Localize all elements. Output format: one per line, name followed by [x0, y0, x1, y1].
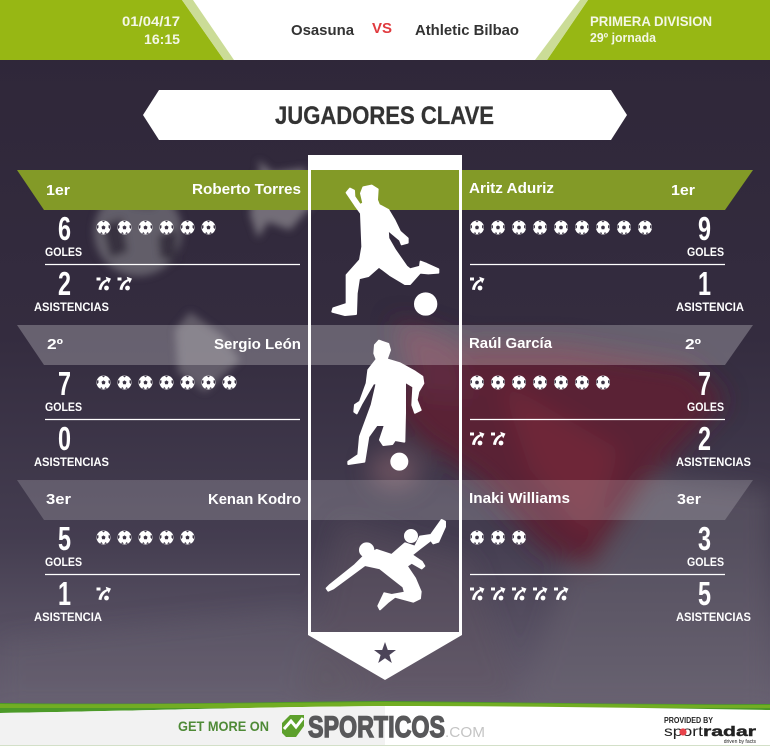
competition: PRIMERA DIVISION: [590, 13, 712, 29]
panel: Raúl García: [469, 335, 751, 469]
assists: 2: [58, 265, 71, 302]
goal icons: [96, 376, 236, 390]
versus: VS: [372, 20, 392, 37]
sportradar credit: sport: [664, 723, 703, 739]
rank: 2º: [47, 337, 64, 353]
goals: [687, 365, 724, 414]
competition: [590, 13, 712, 45]
goals: GOLES: [45, 400, 82, 414]
rank: 1er: [46, 183, 70, 199]
assists: ASISTENCIAS: [676, 610, 751, 624]
goals: 7: [58, 365, 71, 402]
goals: GOLES: [687, 555, 724, 569]
sportradar credit: driven by facts: [724, 739, 756, 745]
match date: [122, 14, 181, 47]
footer: [0, 701, 770, 746]
assists: [676, 575, 751, 624]
goals: GOLES: [687, 400, 724, 414]
icon: star: [374, 642, 396, 663]
assist icons: [470, 432, 506, 445]
assists: [676, 265, 744, 314]
assists: 1: [698, 265, 711, 302]
goals: GOLES: [45, 555, 82, 569]
assists: 0: [58, 420, 71, 457]
assists: ASISTENCIAS: [676, 455, 751, 469]
sportradar credit: [664, 716, 757, 745]
assist icons: [96, 587, 111, 600]
player name: Aritz Aduriz: [469, 180, 554, 197]
rank: 3er: [46, 492, 71, 508]
player name: Inaki Williams: [469, 490, 570, 507]
player name: Raúl García: [469, 335, 553, 352]
rank: 3er: [677, 492, 701, 508]
match date: 16:15: [144, 32, 181, 47]
panel: Inaki Williams: [469, 490, 751, 624]
goals: GOLES: [45, 245, 82, 259]
goals: [45, 210, 82, 259]
icon: sporticos logo: [282, 715, 304, 737]
header left green tab: [0, 0, 224, 60]
match date: 01/04/17: [122, 14, 180, 29]
header right green tab: [547, 0, 770, 60]
goals: [687, 210, 724, 259]
goal icons: [96, 530, 194, 544]
away team: Athletic Bilbao: [415, 22, 519, 39]
get more on: GET MORE ON: [178, 718, 269, 734]
assists: [34, 265, 109, 314]
assists: ASISTENCIA: [34, 610, 102, 624]
sporticos wordmark: .COM: [445, 724, 485, 741]
competition: 29º jornada: [590, 30, 657, 45]
goals: GOLES: [687, 245, 724, 259]
goals: 5: [58, 520, 71, 557]
title banner: JUGADORES CLAVE: [275, 102, 494, 130]
panel: Aritz Aduriz: [469, 180, 744, 314]
goal icons: [470, 220, 652, 234]
rank: 1er: [671, 183, 695, 199]
goals: [687, 520, 724, 569]
goals: [45, 365, 82, 414]
home team: Osasuna: [291, 22, 355, 39]
panel: Roberto Torres: [34, 181, 301, 314]
goals: 9: [698, 210, 711, 247]
divider lines: [45, 264, 725, 574]
assists: ASISTENCIAS: [34, 300, 109, 314]
rank: 2º: [685, 337, 702, 353]
header bar: [0, 0, 770, 60]
assists: [34, 420, 109, 469]
assist icons: [470, 277, 484, 290]
icon: player dribbling: [348, 341, 423, 470]
goal icons: [470, 376, 610, 390]
goal icons: [470, 530, 526, 544]
assist icons: [470, 587, 568, 600]
rank bar 1: [17, 170, 753, 210]
goals: 6: [58, 210, 71, 247]
goals: 7: [698, 365, 711, 402]
player name: Sergio León: [214, 336, 301, 353]
assists: [34, 575, 102, 624]
panel: Kenan Kodro: [34, 491, 301, 624]
goals: 3: [698, 520, 711, 557]
assists: 5: [698, 575, 711, 612]
sportradar credit: radar: [703, 723, 757, 739]
goal icons: [96, 220, 216, 234]
panel: Sergio León: [34, 336, 301, 469]
frame with pennant: [308, 155, 462, 680]
player name: Kenan Kodro: [208, 491, 301, 508]
sporticos wordmark: SPORTICOS: [308, 711, 445, 744]
rank bar 3: [17, 480, 753, 520]
assists: 1: [58, 575, 71, 612]
goals: [45, 520, 82, 569]
assists: 2: [698, 420, 711, 457]
title banner: [143, 90, 627, 140]
icon: player kicking: [332, 186, 438, 315]
icon: player volleying: [327, 520, 445, 609]
rank bar 2: [17, 325, 753, 365]
assists: [676, 420, 751, 469]
assists: ASISTENCIAS: [34, 455, 109, 469]
player name: Roberto Torres: [192, 181, 301, 198]
assists: ASISTENCIA: [676, 300, 744, 314]
assist icons: [96, 277, 132, 290]
sportradar credit: PROVIDED BY: [664, 716, 714, 725]
